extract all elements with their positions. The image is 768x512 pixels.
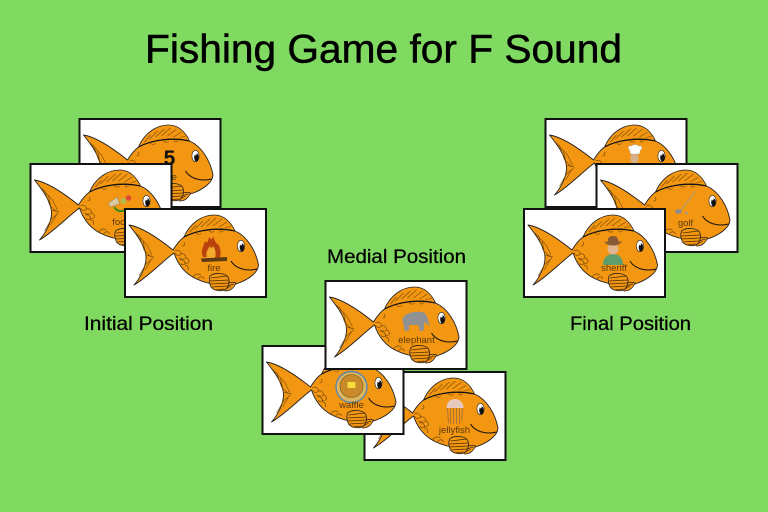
- title: Fishing Game for F Sound: [145, 28, 622, 72]
- label sheriff: sheriff: [601, 263, 627, 274]
- initial position group: [30, 119, 266, 297]
- card: sheriff: [524, 209, 665, 297]
- icon: fire: [201, 236, 227, 262]
- icon: food: [108, 195, 131, 211]
- label jellyfish: jellyfish: [438, 425, 470, 436]
- heading: final position: Final Position: [570, 314, 691, 335]
- icon: chef: [628, 144, 642, 163]
- label food: food: [112, 217, 131, 228]
- card: chef: [546, 119, 686, 207]
- label waffle: waffle: [338, 400, 364, 411]
- icon: jellyfish: [446, 399, 464, 424]
- icon: golf club: [675, 191, 696, 214]
- icon: elephant: [402, 312, 430, 331]
- final position group: [524, 119, 738, 297]
- card: food: [30, 164, 172, 252]
- icon: sheriff: [603, 236, 623, 265]
- label five: five: [162, 172, 177, 183]
- icon: waffle: [336, 372, 367, 402]
- number 5: 5: [164, 147, 176, 170]
- card: five: [80, 119, 220, 207]
- card: jellyfish: [364, 372, 506, 460]
- heading: initial position: Initial Position: [84, 314, 213, 335]
- label fire: fire: [207, 263, 221, 274]
- card: golf: [596, 164, 738, 252]
- label golf: golf: [678, 218, 694, 229]
- medial position group: [262, 281, 506, 460]
- label elephant: elephant: [398, 335, 435, 346]
- heading: medial position: Medial Position: [327, 247, 466, 268]
- card: fire: [125, 209, 266, 297]
- card: elephant: [326, 281, 466, 369]
- card: waffle: [262, 346, 404, 434]
